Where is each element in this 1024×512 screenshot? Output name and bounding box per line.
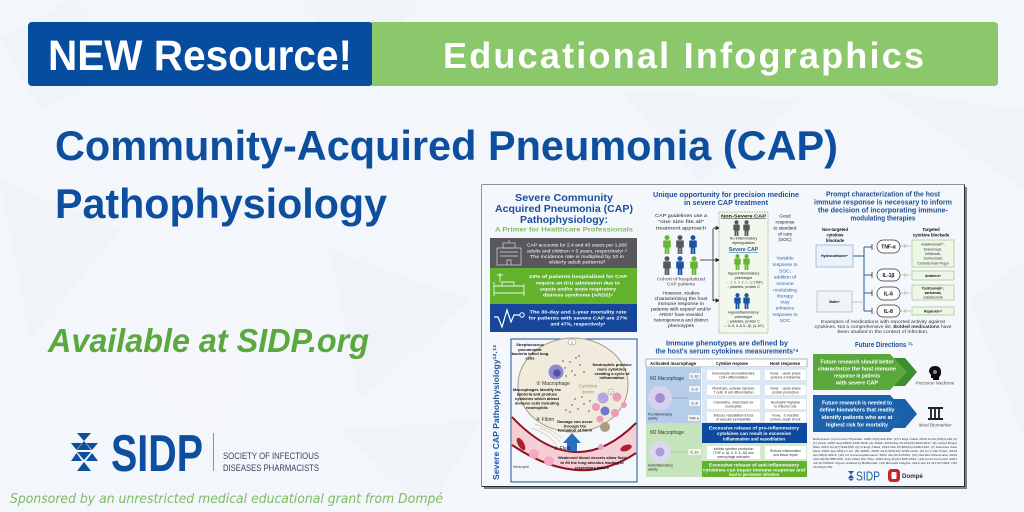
non-targeted heading: blockade — [826, 238, 845, 243]
text: variable response: modulating — [773, 288, 797, 294]
label: macrophages identify: neutrophils — [526, 405, 549, 410]
heading: precision medicine — [653, 192, 799, 207]
text: studies: immune response in — [658, 301, 704, 306]
targeted heading: cytokine blockade — [913, 232, 950, 238]
non-targeted heading — [822, 227, 848, 243]
M1 responses: proteins & histamine — [771, 376, 801, 380]
neutrophil cluster — [592, 392, 627, 432]
card title — [495, 193, 633, 234]
label: neutrophils: inflammation — [600, 375, 625, 380]
hydrocortisone: Hydrocortisone⁸ — [821, 254, 848, 258]
text: variable response: addition of — [774, 274, 797, 280]
step 3: 3 — [610, 390, 612, 394]
heading: prompt characterization: the decision of incorporating immune- — [818, 208, 949, 214]
logo: SIDP: SOCIETY OF INFECTIOUS — [223, 451, 319, 462]
M1 macrophage column: IL-8 — [691, 402, 698, 406]
text: variable response: immune — [776, 281, 794, 287]
arrow: future research 2: Future research is needed to — [822, 400, 893, 406]
availability note: Available at SIDP.org — [47, 322, 369, 359]
label: weakened vessels: to fill the lung alveolus leading to — [560, 460, 624, 465]
references: Jul;12:706522. Figure created by BioRender. (14) Biomark Insights. 2019 Jan;14:1177271919. (15) — [813, 461, 957, 465]
M2 responses: macrophage activation — [717, 455, 750, 459]
label: damage: Damage can occur — [557, 419, 593, 424]
M2 macrophage column: activity — [648, 468, 658, 472]
reparixin: Reparixin¹² — [924, 310, 943, 314]
TNF drugs: Infliximab, — [925, 252, 941, 256]
text: good response: response — [776, 220, 795, 224]
banner: Educational Infographics — [372, 22, 998, 86]
text: good response: of care — [778, 232, 792, 236]
card title: A Primer for Healthcare Professionals — [495, 226, 633, 234]
M1 responses: Cd4+ differentiation — [719, 376, 748, 380]
step 1 — [568, 339, 576, 345]
M1 macrophage column — [646, 367, 701, 423]
callout: pro-inflammatory — [702, 423, 807, 443]
text: variable response: Variable — [776, 256, 794, 262]
text: cohort caption: Cohort of hospitalized — [657, 276, 705, 282]
non-severe CAP — [721, 214, 766, 245]
IL-6 drugs: Tocilizumab¹¹, — [922, 286, 944, 290]
text: guidelines: "one size fits all" — [658, 219, 705, 224]
stat: mortality: The 30-day and 1-year mortality rate — [530, 310, 627, 314]
M1 responses: neutrophils — [725, 404, 742, 408]
stat: incidence: The incidence rate is multiplied by 10 in — [530, 254, 624, 259]
M1 responses: Fever, ↑ acute phase — [770, 372, 801, 376]
logo: SIDP small — [848, 468, 880, 484]
hyperinflammatory — [724, 254, 763, 289]
table headers: Activated macrophage — [650, 361, 696, 366]
IL-6 drugs — [912, 285, 954, 300]
callout: anti-inflammatory: Excessive release of anti-inflammatory — [709, 462, 799, 468]
panel: phenotypes — [719, 212, 768, 333]
table headers: Cytokine response — [716, 361, 748, 366]
TNF drugs — [912, 240, 954, 267]
references: Oct;16(10):585-595. (12) Infect Dis Ther. 2022 Aug;11(4):1505-1521. (13) Front Immunol. 2021 — [813, 457, 958, 461]
hypoinflammatory: phenotype — [735, 315, 752, 319]
references: 24;201(2):254. — [813, 465, 833, 469]
text: good response: (SOC) — [778, 237, 792, 242]
caption: medications: cytokines. Not a comprehensive list. Bolded medications have — [814, 324, 952, 329]
sponsor note: Sponsored by an unrestricted medical educational grant from Dompé — [10, 491, 443, 507]
M2 responses: (TNF-α, 1β, 6, 8, IL-18) and — [713, 451, 754, 455]
text: studies — [651, 290, 711, 328]
label: neutrophils: more cytokines — [597, 366, 627, 372]
M1 responses: Pleiotropic, activate cytotoxic — [712, 386, 755, 390]
stat: incidence: adults and children < 5 years, respectively¹·² — [527, 248, 627, 254]
icon: ideal biomarker — [918, 407, 952, 428]
arrow: future research 2 — [813, 395, 917, 432]
label: bacteria: pneumoniae — [518, 347, 543, 352]
arrow: future research 1: characterize the host immune — [818, 366, 896, 372]
label: bacteria: cells — [526, 356, 535, 360]
non-severe CAP: dysregulation — [732, 241, 755, 245]
statin: Statin⁹ — [829, 300, 840, 304]
arrow: future research 1: response in patients — [834, 374, 880, 380]
label: macrophage: ② Macrophage — [536, 381, 570, 387]
text: variable response — [772, 256, 798, 324]
text: variable response: SOC — [780, 318, 791, 324]
references: References: (1) Am Fam Physician. 2006;73(3):442-450. (2) N Engl J Med. 2019 Jul 31;370(1):e32 (3) — [813, 437, 957, 441]
card title: Acquired Pneumonia (CAP) — [495, 204, 633, 215]
macrophage cell — [548, 364, 564, 380]
non-targeted heading: cytokine — [826, 232, 844, 238]
logo: SIDP small: SIDP — [856, 468, 880, 484]
table headers: Host response — [770, 361, 800, 366]
text: variable response: SOC; — [779, 268, 791, 274]
text: studies: However, studies — [662, 290, 700, 296]
text: variable response: may — [780, 300, 790, 306]
non-targeted heading: Non-targeted — [822, 227, 848, 232]
heading: prompt characterization: modulating therapies — [850, 216, 916, 222]
references: Apr;68(4):403-6. (10) Int Immunopharmacol. 2021 Jan;90:107200. (11) Nat Rev Rheumatol. 2020 — [813, 453, 958, 457]
text: studies: phenotypes — [668, 323, 695, 328]
arrow: future research 2: identify patients who are at — [822, 415, 893, 421]
M1 macrophage column: IL-6 — [691, 388, 698, 392]
callout: anti-inflammatory — [702, 461, 807, 477]
hypoinflammatory: ↑ platelets, protein C — [727, 320, 760, 324]
icon group: patient cohort — [663, 235, 698, 275]
heading: prompt characterization — [814, 192, 952, 222]
M1 responses: protein production — [772, 390, 799, 394]
title: Pathophysiology — [55, 180, 388, 227]
M1 responses: Fever, ↑ acute phase — [770, 386, 801, 390]
hypoinflammatory: ↓ ↓ IL-6, IL-8, IL-1β, (IL-10*) — [723, 324, 764, 328]
M1 macrophage column: IL-1β — [690, 374, 699, 378]
arrow: future research 1: with severe CAP — [835, 380, 878, 386]
text: guidelines — [655, 213, 708, 230]
references — [813, 437, 958, 469]
M1 responses: T cells, B cell differentiation — [713, 390, 754, 394]
text: variable response: response to — [772, 262, 798, 268]
stat: mortality: for patients with severe CAP are 27% — [528, 316, 628, 320]
label: macrophages identify: Macrophages identify the — [513, 387, 562, 392]
title: Community-Acquired Pneumonia (CAP) — [55, 122, 838, 169]
label: macrophages identify: cytokines which attract — [515, 396, 560, 401]
arrow: future research 2: highest risk for mortality — [826, 422, 888, 428]
severe CAP heading: Severe CAP — [729, 247, 759, 253]
references: (1) Chest. 2020 Sep;158(3):1036-1046. (4) JAMA. 2019 May 20;321(20):2003-2017. (5) Lancet Respir — [813, 441, 957, 445]
heading: prompt characterization: Prompt characterization of the host — [826, 192, 941, 198]
M1 macrophage column: activity — [648, 416, 658, 420]
stat: ICU admission: require an ICU admission due to — [536, 280, 620, 286]
M1 macrophage column: Pro-inflammatory — [648, 412, 673, 416]
logo: SIDP: SIDP — [111, 425, 203, 483]
label: fibrin: ④ Fibrin — [536, 417, 554, 423]
panel: pathophysiology illustration — [511, 338, 637, 482]
stat: incidence — [490, 238, 637, 268]
cytokine dots — [562, 355, 596, 413]
card title: Pathophysiology: — [520, 215, 608, 226]
callout: pro-inflammatory: cytokines can result in excessive — [717, 431, 791, 436]
banner: Educational Infographics: Educational Infographics — [443, 35, 924, 76]
M2 macrophage column — [646, 423, 702, 477]
icon: precision medicine — [916, 366, 955, 386]
IL-6 drugs: sarilumab, — [925, 291, 942, 295]
hypoinflammatory: Hypoinflammatory — [728, 310, 759, 314]
title — [55, 122, 838, 227]
heading: immune phenotypes: Immune phenotypes are defined by — [666, 340, 788, 348]
M1 responses: Fever, ↑C-reactive — [772, 414, 799, 418]
diagram: cytokine blockade — [816, 227, 954, 317]
banner: NEW Resource: NEW Resource! — [48, 32, 352, 80]
label: neutrophils: Neutrophils produce — [592, 362, 632, 367]
caption: medications — [814, 319, 952, 334]
label: bacteria — [512, 342, 549, 360]
callout: anti-inflammatory: cytokines can impair immune response and — [703, 468, 805, 472]
stat: incidence: elderly adult patients³ — [549, 260, 606, 264]
hyperinflammatory: ↓ platelets, protein C — [727, 285, 760, 289]
M2 responses — [702, 443, 807, 461]
logo: Dompe — [888, 469, 924, 482]
connectors — [852, 244, 911, 314]
text: guidelines: treatment approach — [656, 226, 707, 230]
heading: immune phenotypes — [656, 340, 799, 356]
M1 responses: to infection site — [774, 404, 797, 408]
TNF drugs: Golimumab, — [923, 256, 943, 260]
heading: future directions: Future Directions ¹⁵ — [855, 342, 913, 349]
icon: ideal biomarker: Ideal Biomarker — [918, 422, 952, 428]
stat: ICU admission — [490, 268, 637, 304]
arrow: future research 1: Future research should better — [820, 360, 894, 366]
callout: pro-inflammatory: Excessive release of pro-inflammatory — [709, 426, 799, 430]
references: Med. 2022 Jan;48(1):1-12. (8) JAMA. 2020 Jul 6;323(13):1239-1242. (9) Int J Clin Pract. 2014 — [813, 449, 958, 453]
text: good response: Good — [779, 214, 791, 218]
label: bacteria: Streptococcus — [516, 342, 545, 347]
fibrin strands — [532, 424, 562, 444]
blood vessel — [512, 417, 636, 470]
M2 responses: Inhibits cytokine production — [714, 447, 754, 451]
rotated label: Severe CAP Pathophysiology: Severe CAP Pathophysiology¹²·¹³ — [491, 345, 501, 480]
label: macrophages identify: immune cells including — [515, 400, 560, 406]
targeted heading — [913, 227, 950, 238]
label: damage: through the — [564, 424, 587, 428]
M1 responses — [702, 367, 807, 423]
label: neutrophil: Neutrophil — [513, 465, 529, 469]
callout: pro-inflammatory: inflammation and vasodilation — [723, 436, 785, 442]
text: variable response: enhance — [776, 306, 795, 312]
step 3 — [608, 389, 614, 395]
IL-8: IL-8 — [884, 309, 893, 315]
label: bacteria: bacteria infect lung — [512, 351, 549, 356]
stat: mortality: and 47%, respectively⁴ — [550, 322, 606, 326]
table: macrophage cytokines — [646, 359, 807, 477]
label: cytokine storm — [579, 384, 598, 396]
TNF drugs: Adalimumab¹⁰, — [921, 242, 945, 246]
label: neutrophils: creating a cycle of — [595, 371, 630, 376]
M2 macrophage column: IL-10 — [691, 450, 699, 454]
hyperinflammatory: Hyperinflammatory — [728, 272, 760, 276]
hyperinflammatory: phenotype — [735, 276, 752, 280]
text: good response — [774, 214, 797, 242]
text: cohort caption — [657, 276, 705, 286]
arrow: future research 2: define biomarkers that readily — [820, 408, 894, 414]
M1 macrophage column: M1 Macrophage — [650, 376, 684, 382]
alveolus — [518, 338, 628, 432]
caption: medications: Examples of medications with reported activity against — [821, 319, 946, 324]
TNF-alpha: TNF-α — [881, 244, 897, 250]
stat: mortality — [490, 304, 637, 332]
caption: medications: been studied in the context of infection. — [838, 329, 928, 334]
card title: Severe Community — [515, 193, 613, 204]
text: studies: ARDS⁴ have revealed — [659, 312, 703, 317]
text: variable response: response to — [772, 312, 798, 318]
heading: precision medicine: Unique opportunity for precision medicine — [653, 192, 799, 199]
IL-1 beta: IL-1β — [883, 273, 894, 279]
hyperinflammatory: ↑ ↑, IL-6, IL-8, IL-1β (TNF) — [724, 280, 763, 284]
step 1: 1 — [571, 340, 573, 344]
non-severe CAP: No inflammatory — [730, 236, 757, 240]
label: fluid: ⑤ Fluid — [554, 446, 571, 452]
M2 responses: and tissue repair — [773, 453, 799, 457]
label: weakened vessels: Weakened blood vessels allow fluid — [558, 455, 627, 460]
references: Med. 2015 Jul;3(7):548-555. (6) N Engl J Med. 2021 Mar 25;384(12):1108-1120. (7) Intensive Care — [813, 445, 958, 449]
text: studies: patients with sepsis² and/or — [651, 306, 711, 312]
label: macrophages identify — [513, 387, 562, 410]
table headers — [646, 359, 807, 367]
M1 responses: Neutrophil migration — [771, 400, 800, 404]
M2 macrophage column: Anti-inflammatory — [648, 464, 673, 468]
text: studies: characterizing the host — [654, 296, 708, 301]
text: cohort caption: CAP patients — [667, 282, 696, 286]
text: good response: to standard — [774, 226, 797, 230]
label: macrophages identify: bacteria and produce — [517, 392, 558, 396]
IL-6: IL-6 — [884, 292, 893, 298]
M1 responses: Induces vasodilation & loss — [714, 414, 754, 418]
TNF drugs: Certolizumab Pegol — [917, 262, 949, 266]
label: neutrophils — [592, 362, 632, 380]
logo: SIDP — [71, 425, 319, 483]
anakinra: Anakinra⁶ — [925, 274, 941, 278]
arrows: cohort to phenotypes — [700, 226, 719, 302]
heading: precision medicine: in severe CAP treatment — [684, 200, 769, 207]
M1 macrophage column: TNF-α — [689, 416, 699, 420]
callout: anti-inflammatory: lead to persistent infection — [729, 472, 779, 477]
M1 responses: Chemokine, chemotaxis for — [714, 400, 754, 404]
text: studies: heterogeneous and distinct — [654, 318, 709, 322]
hypoinflammatory — [723, 293, 764, 328]
infographic card — [482, 184, 967, 489]
targeted heading: Targeted — [922, 227, 940, 232]
heading: immune phenotypes: the host's serum cytokines measurements¹⁴ — [656, 348, 799, 356]
label: weakened vessels — [558, 455, 627, 470]
stat: ICU admission: distress syndrome (ARDS)⁴ — [543, 292, 614, 298]
heading: prompt characterization: immune response is necessary to inform — [814, 200, 952, 206]
M1 responses: protein, septic shock — [770, 418, 801, 422]
IL-6 drugs: satralizumab — [923, 296, 943, 300]
TNF drugs: Etanercept, — [924, 248, 942, 252]
logo: SIDP: DISEASES PHARMACISTS — [223, 463, 319, 474]
label: weakened vessels: respiratory failure — [575, 465, 610, 470]
fluid arrow — [563, 433, 581, 451]
label: damage — [557, 419, 593, 432]
icon: precision medicine: Precision Medicine — [916, 380, 955, 386]
stat: ICU admission: sepsis and/or acute respiratory — [540, 286, 616, 292]
label: cytokine storm: Cytokine — [579, 384, 598, 390]
label: damage: formation of fibrin — [558, 428, 593, 432]
logo: Dompe: Dompé — [902, 474, 924, 480]
M1 responses: of vascular permeability — [716, 418, 751, 422]
arrow: future research 1 — [813, 354, 917, 390]
non-severe CAP: Non-Severe CAP — [721, 214, 766, 218]
M1 responses: Granulocyte chemoattractant, — [712, 372, 755, 376]
text: variable response: therapy — [777, 294, 794, 300]
stat: incidence: CAP accounts for 2.4 and 40 cases per 1,000 — [527, 242, 627, 248]
M2 responses: Reduce inflammation — [770, 449, 801, 453]
M2 macrophage column: M2 Macrophage — [650, 430, 684, 436]
stat: ICU admission: 23% of patients hospitalized for CAP — [529, 274, 627, 279]
text: guidelines: CAP guidelines use a — [655, 213, 708, 218]
label: cytokine storm: storm — [582, 390, 594, 396]
